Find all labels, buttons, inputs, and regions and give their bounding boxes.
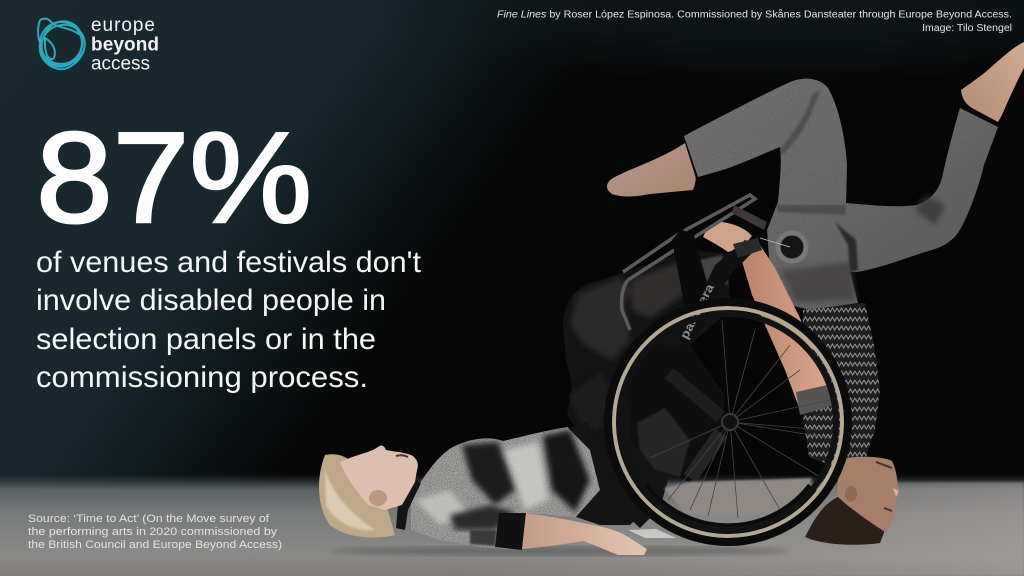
logo mark: teal rings <box>35 16 91 72</box>
paper on floor <box>628 529 676 538</box>
statement text: of venues and festivals don't <box>36 246 422 279</box>
belt and hip <box>568 422 640 525</box>
source note: Source: ‘Time to Act’ (On the Move survey of <box>28 513 270 525</box>
patterned top <box>801 303 880 470</box>
source note <box>28 513 282 551</box>
headline number: 87% <box>36 106 312 250</box>
source note: the British Council and Europe Beyond Access) <box>28 539 282 551</box>
upper head, inverted <box>805 457 899 545</box>
wheelchair frame <box>622 195 806 350</box>
dark trousers of lying dancer <box>563 250 730 528</box>
lying dancer: neck collar <box>396 478 421 530</box>
statement text: commissioning process. <box>36 361 368 394</box>
statement text: selection panels or in the <box>36 323 376 356</box>
logo text: beyond <box>91 34 159 56</box>
foot: right <box>961 42 1024 122</box>
forearm of upper dancer <box>738 240 830 410</box>
hand on frame <box>703 222 752 252</box>
photo credit <box>497 8 1012 34</box>
floating leg trousers <box>684 79 998 310</box>
trouser shading <box>776 90 945 302</box>
brand lettering: panthera <box>677 281 717 341</box>
foot: left <box>607 143 696 196</box>
lying dancer: arm and hand <box>522 513 647 555</box>
statement text: involve disabled people in <box>36 284 386 317</box>
logo text: access <box>91 54 150 74</box>
lying dancer: ear <box>369 490 387 506</box>
photo credit: Image: Tilo Stengel <box>922 22 1012 34</box>
logo text <box>91 15 159 74</box>
logo text: europe <box>91 15 155 36</box>
source note: the performing arts in 2020 commissioned by <box>28 526 278 538</box>
floor <box>0 474 1024 576</box>
lying dancer: hair <box>319 454 395 538</box>
floor seen through wheel <box>664 478 812 518</box>
main wheel <box>608 302 848 542</box>
statement text <box>36 246 422 394</box>
floor shadow <box>330 546 790 556</box>
photo: dancers and wheelchair <box>319 42 1024 556</box>
logo: europe beyond access <box>35 15 159 74</box>
lying dancer: jumper <box>411 427 600 550</box>
lying dancer: face <box>340 446 418 510</box>
cuff <box>495 513 526 550</box>
wrist sleeve <box>796 384 835 415</box>
seat and frame inside wheel <box>628 345 725 482</box>
photo credit: Fine Lines by Roser López Espinosa. Commissioned by Skånes Dansteater through Europe Beyond Access. <box>497 8 1012 20</box>
